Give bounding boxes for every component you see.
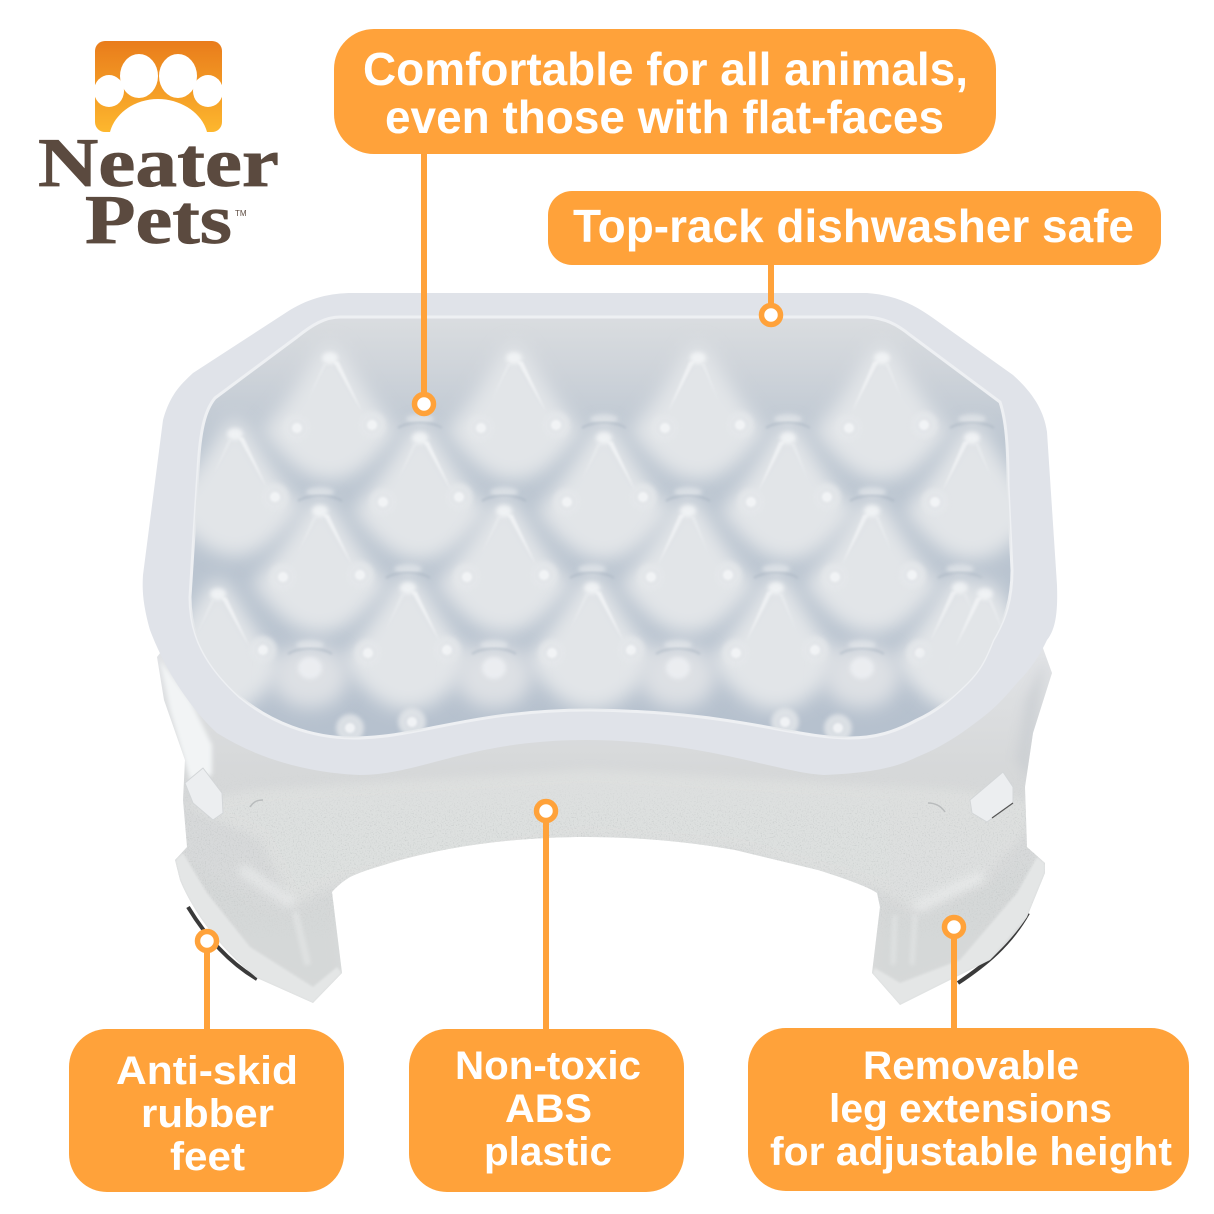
callout: non-toxic ABS plastic: plastic xyxy=(484,1130,612,1174)
logo wordmark: Neater xyxy=(38,125,279,202)
rubber feet xyxy=(188,907,1028,983)
callout: non-toxic ABS plastic: ABS xyxy=(505,1087,592,1131)
callout: comfortable for all animals: even those with flat-faces xyxy=(385,91,944,143)
product: raised slow-feeder bowl xyxy=(140,293,1070,1005)
leg clips xyxy=(185,768,1013,822)
callout: anti-skid rubber feet: feet xyxy=(170,1135,245,1179)
bowl body and legs xyxy=(140,640,1070,1005)
food well xyxy=(190,317,1012,738)
icon: paw mark xyxy=(94,41,223,132)
callout: anti-skid rubber feet: Anti-skid xyxy=(116,1049,298,1093)
callout: anti-skid rubber feet: rubber xyxy=(141,1092,274,1136)
logo wordmark xyxy=(38,125,279,259)
callout: non-toxic ABS plastic: Non-toxic xyxy=(455,1044,641,1088)
callout: non-toxic ABS plastic xyxy=(409,802,684,1192)
callout: anti-skid rubber feet xyxy=(69,932,344,1192)
logo wordmark: Pets xyxy=(85,182,232,259)
callout: removable leg extensions: Removable xyxy=(863,1044,1079,1088)
slow-feed bumps xyxy=(192,348,1010,736)
logo wordmark: TM xyxy=(235,209,247,218)
callout: removable leg extensions xyxy=(748,918,1189,1191)
callout: comfortable for all animals: Comfortable for all animals, xyxy=(363,43,968,95)
logo: Neater Pets xyxy=(38,41,279,259)
callout: dishwasher safe: Top-rack dishwasher safe xyxy=(573,200,1134,252)
callout: dishwasher safe xyxy=(548,191,1161,324)
callout: removable leg extensions: for adjustable height xyxy=(770,1130,1172,1174)
bowl rim xyxy=(143,293,1057,775)
callout: removable leg extensions: leg extensions xyxy=(829,1087,1112,1131)
callout: comfortable for all animals xyxy=(334,29,996,414)
